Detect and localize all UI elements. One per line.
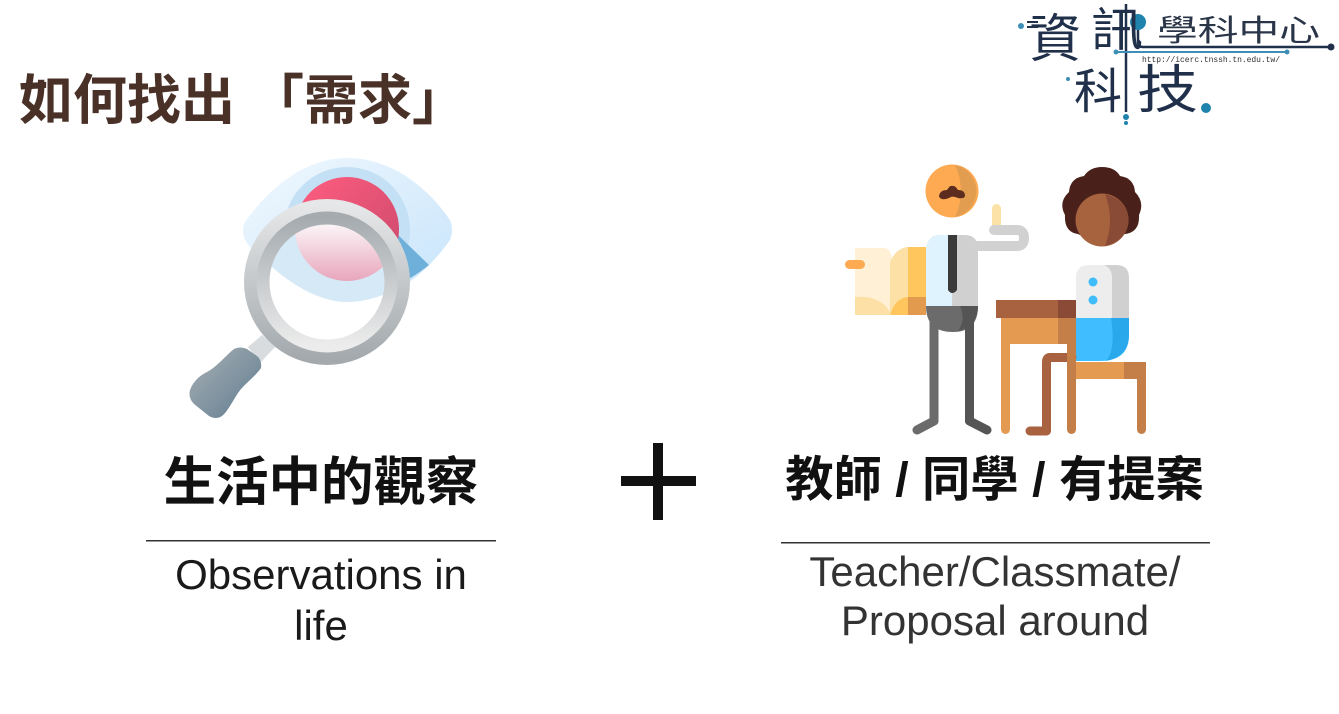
desk xyxy=(1001,317,1010,434)
open book xyxy=(845,247,926,315)
left caption: life xyxy=(294,602,348,649)
teacher shirt xyxy=(926,235,978,306)
right caption: Proposal around xyxy=(841,597,1149,644)
title: 如何找出 「需求」 xyxy=(19,71,466,131)
magnifier handle xyxy=(190,348,261,418)
teacher arm and finger xyxy=(992,204,1001,232)
icon: eye under magnifying glass xyxy=(190,158,452,418)
right caption xyxy=(809,548,1181,644)
student leg xyxy=(1030,358,1072,431)
left heading: 生活中的觀察 xyxy=(163,453,478,512)
right caption: Teacher/Classmate/ xyxy=(809,548,1181,595)
logo xyxy=(1018,0,1334,125)
chair xyxy=(1076,362,1124,379)
logo: http://icerc.tnssh.tn.edu.tw/ xyxy=(1142,56,1280,65)
student face xyxy=(1076,194,1128,246)
logo: 技 xyxy=(1137,48,1198,123)
logo: 學科中心 xyxy=(1157,6,1320,50)
magnifier neck xyxy=(248,335,275,363)
teacher tie xyxy=(948,235,957,293)
student torso xyxy=(1076,265,1129,318)
student trousers xyxy=(1076,318,1129,361)
right divider xyxy=(781,542,1210,544)
left divider xyxy=(146,540,496,542)
right heading: 教師 / 同學 / 有提案 xyxy=(785,453,1204,507)
left caption: Observations in xyxy=(175,551,467,598)
eye outline xyxy=(243,158,452,302)
eye pupil xyxy=(295,177,399,281)
icon: teacher and student xyxy=(845,164,1146,434)
teacher trousers and legs xyxy=(926,306,978,332)
logo circuit lines xyxy=(1138,22,1331,47)
left caption xyxy=(175,551,467,649)
magnifier lens xyxy=(270,224,384,302)
student hair xyxy=(1062,167,1141,240)
plus sign xyxy=(621,443,696,520)
teacher head xyxy=(926,164,978,218)
logo: 科 xyxy=(1074,52,1122,122)
magnifier ring xyxy=(250,206,404,358)
